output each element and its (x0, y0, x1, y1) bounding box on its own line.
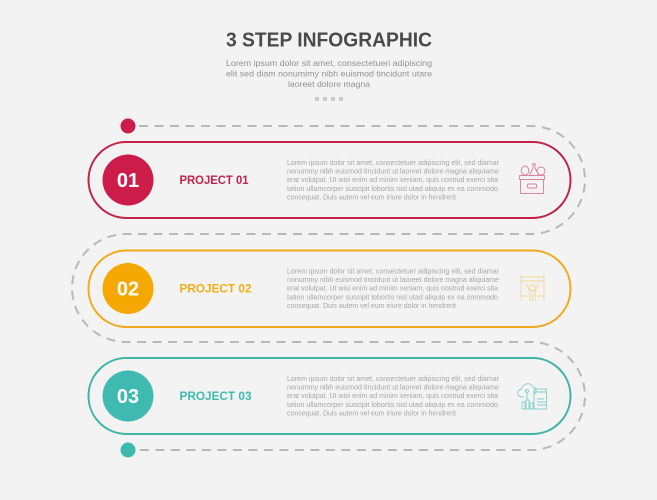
body text 02: Lorem ipsum dolor sit amet, consectetuer adipiscing elit, sed diamar (287, 266, 500, 276)
body text 03: tation ullamcorper suscipit lobortis nisl utad aliquip ex ea commodo (287, 400, 498, 409)
number badge 01 (102, 154, 154, 206)
number badge 03 (102, 370, 154, 422)
subtitle text block: elit sed diam nonumimy nibh euismod tincidunt utare (226, 68, 432, 78)
panel: project 02 (88, 250, 570, 327)
number badge 02 (102, 263, 154, 314)
body text 01: consequat. Duis autem vel eum iriure dolor in hendrerit (287, 192, 456, 201)
body text 03: nonummy nibh euismod tincidunt ut laoreet dolore magna aliquiame (287, 383, 499, 392)
body text 03: erat volutpat. Ut wisi enim ad minim veniam, quis nostrud exerci sita (287, 391, 498, 400)
heading 03: PROJECT 03 (180, 389, 252, 403)
body text 02: tation ullamcorper suscipit lobortis nisl utad aliquip ex ea commodo (287, 292, 498, 301)
body text 03: Lorem ipsum dolor sit amet, consectetuer adipiscing elit, sed diamar (287, 374, 500, 383)
body text 03 (287, 374, 500, 417)
panel: project 03 (88, 358, 570, 434)
body text 02 (287, 266, 500, 310)
body text 01 (287, 158, 500, 201)
body text 03: consequat. Duis autem vel eum iriure dolor in hendrerit (287, 408, 456, 417)
heading 01: PROJECT 01 (180, 173, 249, 187)
number badge 02: 02 (117, 278, 139, 300)
heading 02: PROJECT 02 (180, 282, 252, 296)
icon: box with items (520, 164, 545, 194)
start dot (120, 118, 136, 134)
body text 02: erat volutpat. Ut wisi enim ad minim veniam, quis nostrud exerci sita (287, 284, 498, 293)
subtitle text block: laoreet dolore magna (288, 79, 370, 89)
icon: person at frame (521, 275, 544, 301)
subtitle text block (226, 58, 432, 89)
number badge 03: 03 (117, 386, 139, 408)
body text 01: nonummy nibh euismod tincidunt ut laoreet dolore magna aliquiame (287, 167, 499, 176)
body text 01: erat volutpat. Ut wisi enim ad minim veniam, quis nostrud exerci sita (287, 175, 498, 184)
body text 01: tation ullamcorper suscipit lobortis nisl utad aliquip ex ea commodo (287, 184, 498, 193)
pill outline 03 (88, 358, 570, 434)
icon: cloud and report (518, 384, 546, 409)
pill outline 01 (88, 142, 570, 218)
title: 3 STEP INFOGRAPHIC (226, 28, 432, 52)
pill outline 02 (88, 250, 570, 327)
body text 02: nonummy nibh euismod tincidunt ut laoreet dolore magna aliquiame (287, 275, 499, 284)
dashed connector path (72, 126, 585, 450)
body text 02: consequat. Duis autem vel eum iriure dolor in hendrerit (287, 301, 456, 310)
end dot (120, 442, 136, 458)
subtitle text block: Lorem ipsum dolor sit amet, consectetueri adipiscing (226, 58, 432, 68)
panel: project 01 (88, 142, 570, 218)
pagination dots (315, 97, 343, 101)
body text 01: Lorem ipsum dolor sit amet, consectetuer adipiscing elit, sed diamar (287, 158, 500, 167)
number badge 01: 01 (117, 170, 139, 192)
